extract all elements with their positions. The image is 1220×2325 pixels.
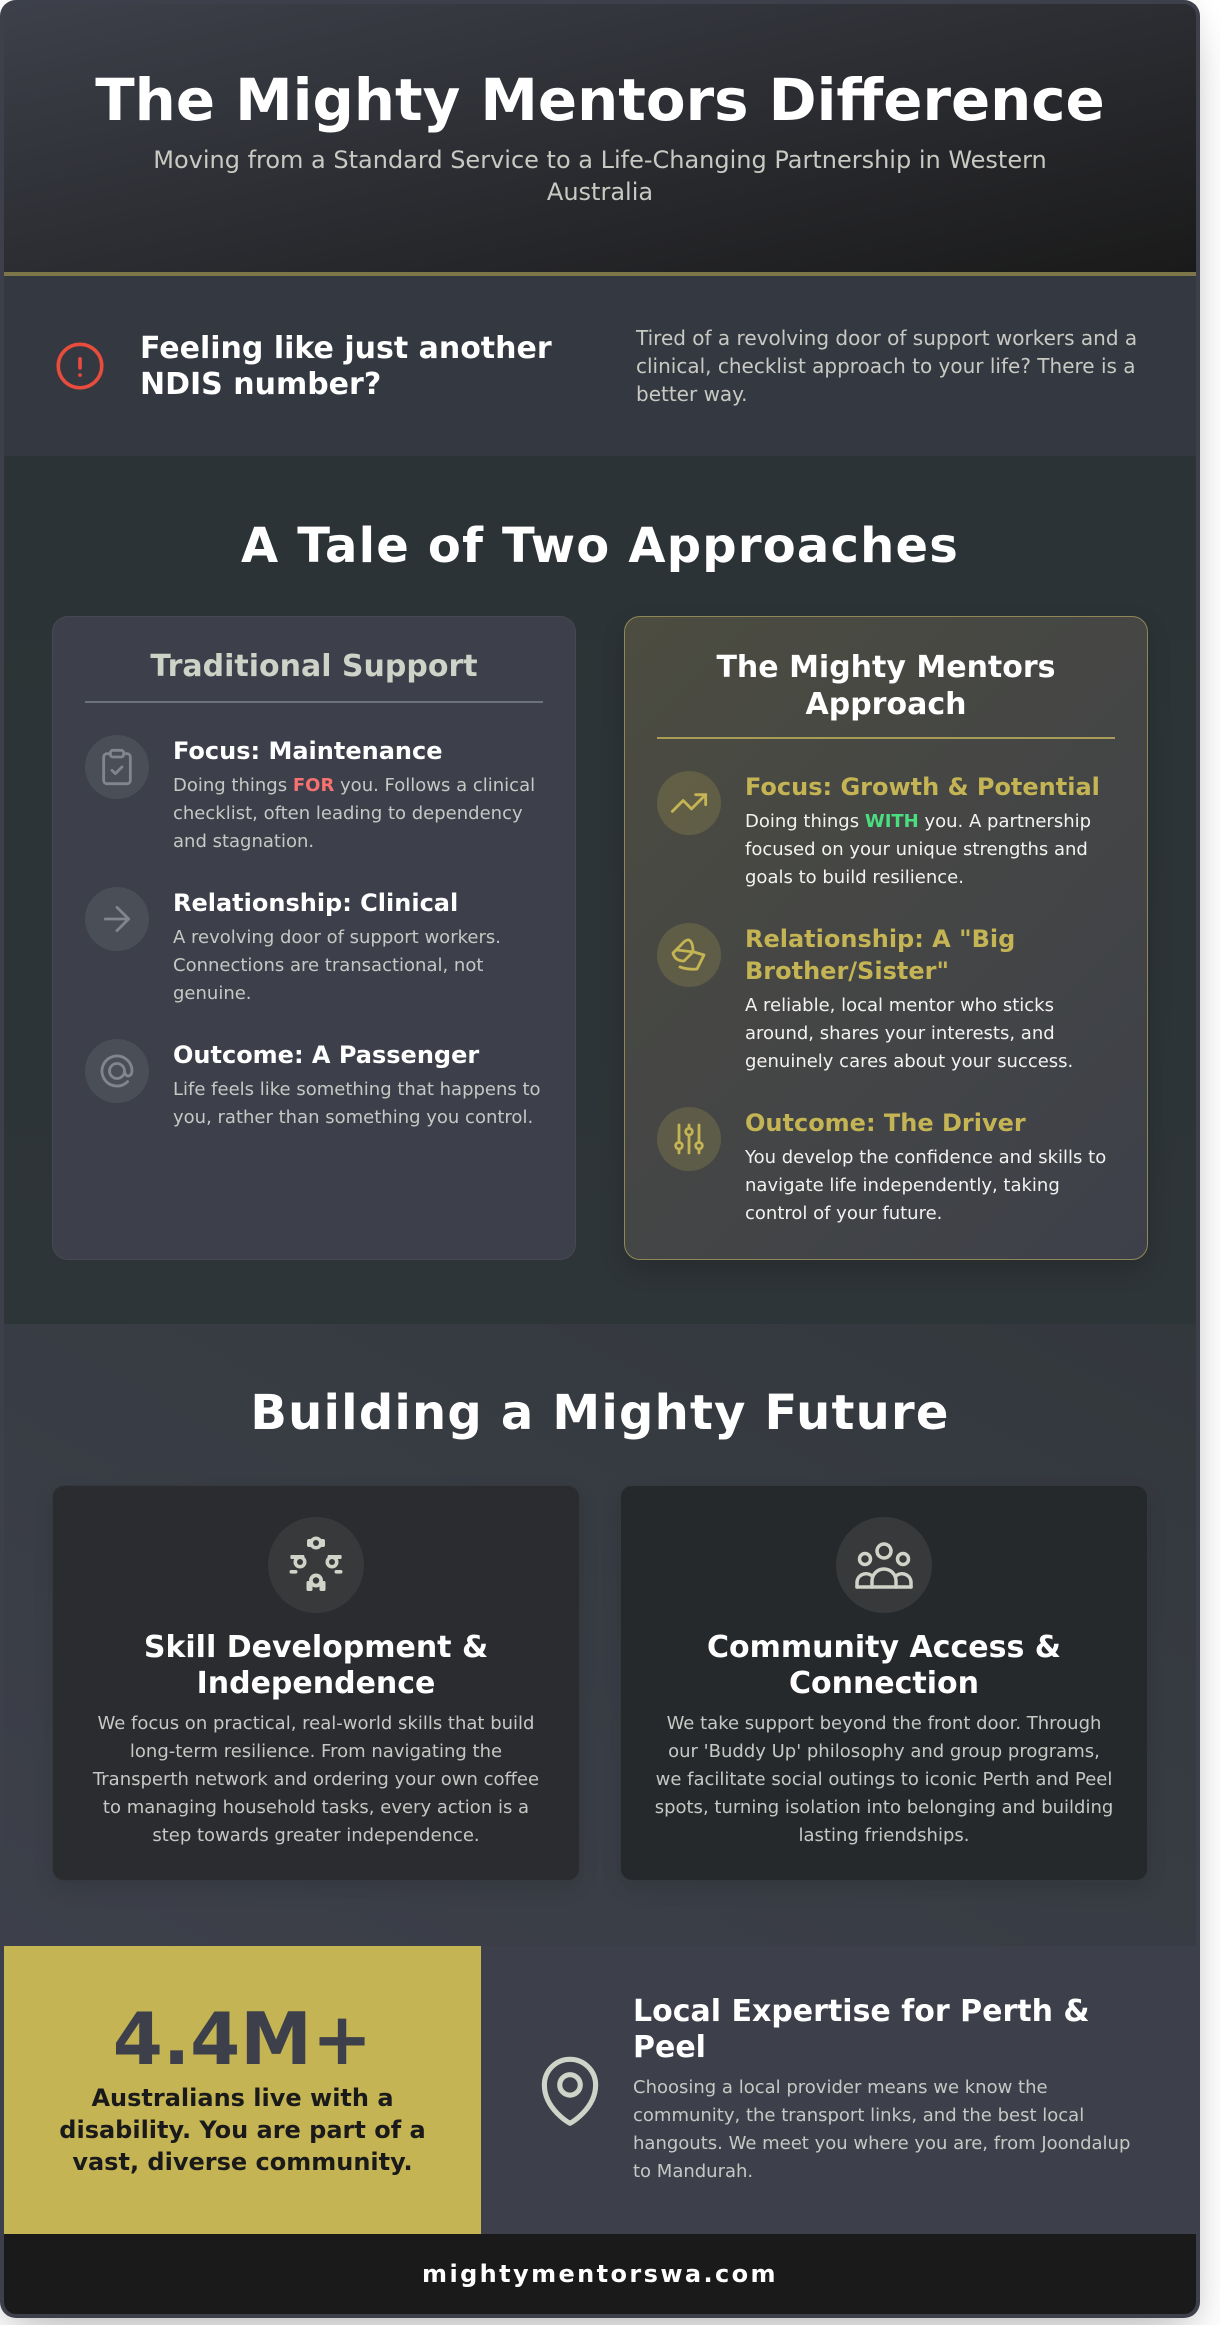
item: relationship big brother: genuinely cares about your success. xyxy=(745,1051,1073,1072)
expertise heading: Local Expertise for Perth & xyxy=(633,1994,1090,2029)
expertise text: Choosing a local provider means we know the xyxy=(633,2077,1048,2098)
section heading: Building a Mighty Future xyxy=(250,1385,950,1441)
card text: We take support beyond the front door. Through xyxy=(667,1713,1101,1734)
item: outcome passenger: Life feels like something that happens to xyxy=(173,1079,541,1100)
icon: at symbol xyxy=(85,1039,149,1103)
icon: arrow right xyxy=(85,887,149,951)
item: focus growth: goals to build resilience. xyxy=(745,867,964,888)
expertise heading xyxy=(633,1994,1090,2065)
item text: Relationship: A "Big xyxy=(745,925,1015,953)
panel: statistic xyxy=(4,1946,481,2234)
card text: step towards greater independence. xyxy=(152,1825,480,1846)
statistic caption: Australians live with a xyxy=(91,2084,394,2112)
subtitle xyxy=(153,146,1047,206)
item: focus maintenance xyxy=(85,735,535,852)
panel: traditional support xyxy=(52,616,576,1260)
item: focus maintenance: Doing things FOR you. Follows a clinical xyxy=(173,775,535,796)
item text: Outcome: A Passenger xyxy=(173,1041,479,1069)
card heading: Independence xyxy=(197,1666,435,1701)
item text: Brother/Sister" xyxy=(745,957,949,985)
item: focus maintenance: checklist, often leading to dependency xyxy=(173,803,523,824)
card heading: Traditional Support xyxy=(150,649,478,684)
title: The Mighty Mentors Difference xyxy=(95,66,1105,134)
panel: skill development xyxy=(52,1485,580,1881)
subtitle: Moving from a Standard Service to a Life-Changing Partnership in Western xyxy=(153,146,1047,174)
item: outcome driver: navigate life independently, taking xyxy=(745,1175,1060,1196)
section heading: A Tale of Two Approaches xyxy=(241,518,959,574)
problem text: better way. xyxy=(636,382,748,406)
subtitle: Australia xyxy=(547,178,653,206)
icon: sliders xyxy=(657,1107,721,1171)
item: relationship clinical: Connections are transactional, not xyxy=(173,955,483,976)
panel: building a mighty future xyxy=(4,1324,1196,1946)
expertise text: hangouts. We meet you where you are, from Joondalup xyxy=(633,2133,1130,2154)
item: relationship clinical xyxy=(85,887,501,1004)
icon: alert xyxy=(56,342,104,390)
website: mightymentorswa.com xyxy=(422,2260,778,2288)
item text: Focus: Maintenance xyxy=(173,737,442,765)
item: focus growth: focused on your unique strengths and xyxy=(745,839,1088,860)
panel: mighty mentors approach xyxy=(624,616,1148,1260)
item: outcome passenger: you, rather than something you control. xyxy=(173,1107,533,1128)
big number: 4.4M+ xyxy=(113,1997,372,2081)
item: relationship clinical: A revolving door of support workers. xyxy=(173,927,501,948)
icon: clipboard check xyxy=(85,735,149,799)
item: relationship big brother: A reliable, local mentor who sticks xyxy=(745,995,1054,1016)
expertise text xyxy=(633,2077,1130,2182)
item: outcome passenger xyxy=(85,1039,541,1128)
icon: trending up xyxy=(657,771,721,835)
item: outcome driver: control of your future. xyxy=(745,1203,942,1224)
card heading xyxy=(707,1630,1061,1701)
card heading xyxy=(716,650,1056,722)
item: outcome driver: You develop the confidence and skills to xyxy=(745,1147,1106,1168)
card heading: Connection xyxy=(789,1666,979,1701)
item: relationship big brother: around, shares your interests, and xyxy=(745,1023,1055,1044)
item: relationship big brother xyxy=(657,923,1073,1072)
card heading: Approach xyxy=(806,687,966,722)
card heading xyxy=(144,1630,488,1701)
card heading: Community Access & xyxy=(707,1630,1061,1665)
item text: Relationship: Clinical xyxy=(173,889,458,917)
panel: local expertise xyxy=(481,1946,1200,2234)
statistic caption: vast, diverse community. xyxy=(72,2148,413,2176)
card text: our 'Buddy Up' philosophy and group programs, xyxy=(668,1741,1100,1762)
expertise heading: Peel xyxy=(633,2030,706,2065)
item text xyxy=(745,925,1015,985)
icon: hand xyxy=(657,923,721,987)
icon: map pin xyxy=(542,2056,598,2126)
card text: to managing household tasks, every action is a xyxy=(103,1797,529,1818)
item: focus growth: Doing things WITH you. A partnership xyxy=(745,811,1091,832)
card text: spots, turning isolation into belonging and building xyxy=(655,1797,1113,1818)
icon: skill circle xyxy=(268,1517,364,1613)
panel: community access xyxy=(620,1485,1148,1881)
card text: we facilitate social outings to iconic Perth and Peel xyxy=(656,1769,1112,1790)
item: focus growth xyxy=(657,771,1100,888)
problem heading: Feeling like just another xyxy=(140,331,552,366)
card heading: Skill Development & xyxy=(144,1630,488,1665)
item text: Focus: Growth & Potential xyxy=(745,773,1100,801)
panel: a tale of two approaches xyxy=(4,456,1196,1324)
statistic caption: disability. You are part of a xyxy=(59,2116,426,2144)
icon: community circle xyxy=(836,1517,932,1613)
statistic caption xyxy=(59,2084,426,2176)
item: relationship clinical: genuine. xyxy=(173,983,252,1004)
card text xyxy=(655,1713,1113,1846)
card heading: The Mighty Mentors xyxy=(716,650,1056,685)
item text: Outcome: The Driver xyxy=(745,1109,1026,1137)
footer xyxy=(4,2234,1196,2314)
expertise text: to Mandurah. xyxy=(633,2161,753,2182)
card text: We focus on practical, real-world skills that build xyxy=(98,1713,534,1734)
panel: problem statement xyxy=(4,276,1196,456)
card text: lasting friendships. xyxy=(798,1825,969,1846)
item: outcome driver xyxy=(657,1107,1106,1224)
item: focus maintenance: and stagnation. xyxy=(173,831,314,852)
card text: long-term resilience. From navigating the xyxy=(130,1741,502,1762)
header panel xyxy=(4,4,1196,276)
card text: Transperth network and ordering your own coffee xyxy=(93,1769,539,1790)
expertise text: community, the transport links, and the best local xyxy=(633,2105,1084,2126)
card text xyxy=(92,1713,539,1846)
problem text: Tired of a revolving door of support workers and a xyxy=(636,326,1137,350)
problem heading xyxy=(140,331,552,402)
problem text: clinical, checklist approach to your life? There is a xyxy=(636,354,1136,378)
problem text xyxy=(636,326,1137,406)
problem heading: NDIS number? xyxy=(140,367,381,402)
